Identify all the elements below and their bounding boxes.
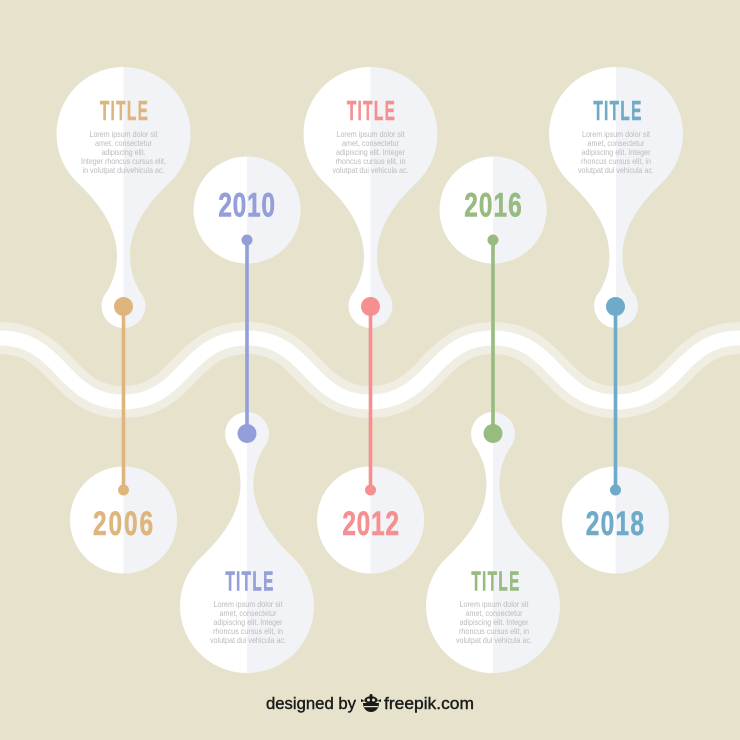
text block 2006: Integer rhoncus cursus elit, xyxy=(81,156,166,166)
milestone 2006: title drop xyxy=(57,67,190,328)
text block 2012: amet, consectetur xyxy=(342,138,399,148)
icon: freepik bee xyxy=(361,694,381,712)
wavy timeline road xyxy=(0,338,740,402)
text block 2010: adipiscing elit. Integer xyxy=(214,617,283,627)
year circle 2006: 2006 xyxy=(93,505,155,543)
text block 2016: adipiscing elit. Integer xyxy=(460,617,529,627)
text block 2006: Lorem ipsum dolor sit xyxy=(90,129,158,139)
text block 2016: TITLE xyxy=(471,566,521,597)
text block 2006: amet, consectetur xyxy=(95,138,152,148)
text block 2016: Lorem ipsum dolor sit xyxy=(460,599,529,609)
text block 2006: in volutpat duivehicula ac. xyxy=(82,165,164,175)
year circle 2012: 2012 xyxy=(342,505,400,543)
milestone 2012: title drop xyxy=(304,67,437,328)
text block 2006: adipiscing elit. xyxy=(102,147,146,157)
text block 2010: TITLE xyxy=(225,566,275,597)
text block 2010: rhoncus cursus elit, in xyxy=(213,626,283,636)
credit: designed by freepik.com: freepik.com xyxy=(384,695,474,713)
text block 2012: rhoncus cursus elit, in xyxy=(336,156,406,166)
year circle 2016 xyxy=(440,156,546,264)
text block 2010: amet, consectetur xyxy=(220,608,277,618)
text block 2012: Lorem ipsum dolor sit xyxy=(336,129,405,139)
milestone 2016: title drop xyxy=(426,412,560,673)
year circle 2010: 2010 xyxy=(218,187,276,225)
text block 2018: TITLE xyxy=(593,95,643,126)
year circle 2012 xyxy=(317,466,424,574)
text block 2012: volutpat dui vehicula ac. xyxy=(332,165,408,175)
milestone 2010: title drop xyxy=(180,412,314,673)
text block 2012: adipiscing elit. Integer xyxy=(336,147,405,157)
year circle 2018: 2018 xyxy=(586,505,645,543)
text block 2018: rhoncus cursus elit, in xyxy=(581,156,651,166)
text block 2018: amet, consectetur xyxy=(588,138,645,148)
text block 2018 xyxy=(578,95,654,175)
text block 2006: TITLE xyxy=(100,95,149,126)
connector 2018 xyxy=(606,297,625,496)
connector 2012 xyxy=(361,297,380,496)
text block 2012 xyxy=(332,95,408,175)
milestone 2018: title drop xyxy=(549,67,683,328)
text block 2010: Lorem ipsum dolor sit xyxy=(214,599,283,609)
text block 2010 xyxy=(210,566,286,645)
credit: designed by freepik.com xyxy=(266,694,474,713)
text block 2018: volutpat dui vehicula ac. xyxy=(578,165,654,175)
text block 2018: Lorem ipsum dolor sit xyxy=(582,129,651,139)
text block 2010: volutpat dui vehicula ac. xyxy=(210,635,286,645)
text block 2012: TITLE xyxy=(347,95,396,126)
text block 2016: volutpat dui vehicula ac. xyxy=(456,635,532,645)
credit: designed by freepik.com: designed by xyxy=(266,695,357,713)
connector 2006 xyxy=(114,297,133,496)
year circle 2018 xyxy=(562,466,669,574)
text block 2016 xyxy=(456,566,532,645)
year circle 2006 xyxy=(70,466,177,574)
text block 2018: adipiscing elit. Integer xyxy=(582,147,651,157)
text block 2016: rhoncus cursus elit, in xyxy=(459,626,529,636)
year circle 2010 xyxy=(194,156,300,264)
connector 2016 xyxy=(484,234,502,443)
text block 2006 xyxy=(81,95,166,175)
text block 2016: amet, consectetur xyxy=(466,608,523,618)
connector 2010 xyxy=(238,234,256,443)
year circle 2016: 2016 xyxy=(464,187,523,225)
